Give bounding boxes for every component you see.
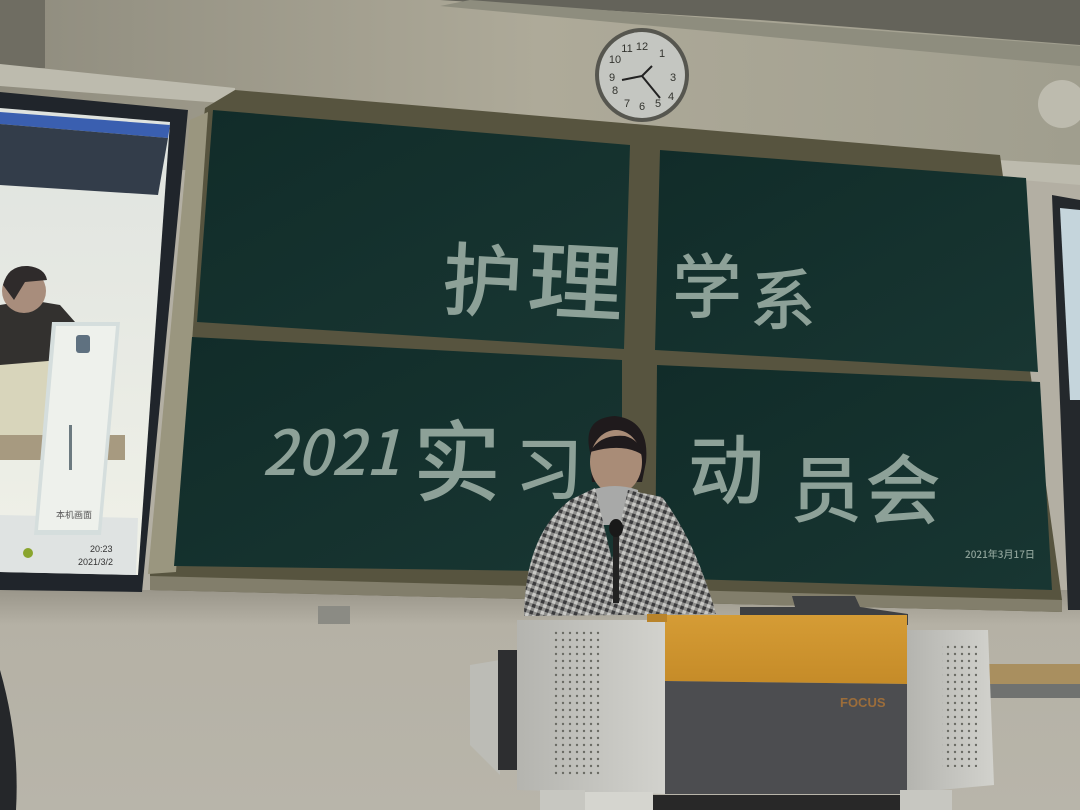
blackboard frame (150, 90, 1062, 612)
chalk title: nursing department: 护 (440, 216, 526, 336)
wall clock: 9 (609, 72, 615, 84)
wall clock: 10 (609, 54, 621, 66)
wall clock: 4 (668, 91, 674, 103)
presenter on screen (0, 266, 75, 365)
right screen edge (1052, 195, 1080, 610)
wall clock: 7 (624, 98, 630, 110)
chalk title: 2021 internship mobilization meeting: 2021年3月17日 (965, 546, 1035, 561)
chalk title: nursing department (440, 214, 816, 344)
wall clock: 8 (612, 85, 618, 97)
wall clock: 11 (621, 43, 633, 55)
projection screen left (0, 92, 188, 592)
lectern: FOCUS (840, 695, 886, 710)
chalk title: 2021 internship mobilization meeting: 习 (515, 415, 583, 514)
chalk title: 2021 internship mobilization meeting: 实 (413, 393, 501, 520)
chalk title: 2021 internship mobilization meeting: 动 (688, 410, 764, 520)
chalk title: 2021 internship mobilization meeting (262, 393, 1035, 561)
wall clock: 12 (636, 41, 648, 53)
chalk tray (150, 576, 1062, 612)
light strip beside board (148, 112, 208, 574)
chalk title: nursing department: 系 (750, 248, 816, 344)
wall clock: 1 (659, 48, 665, 60)
wall clock: 5 (655, 98, 661, 110)
taskbar (23, 544, 113, 567)
taskbar: 20:23 (90, 544, 113, 554)
chalk title: 2021 internship mobilization meeting: 员 (790, 432, 862, 537)
wall clock (595, 28, 689, 122)
phone overlay on screen: 本机画面 (56, 509, 92, 520)
phone overlay on screen (34, 322, 120, 535)
chalk title: 2021 internship mobilization meeting: 2021 (262, 403, 400, 493)
chalk title: 2021 internship mobilization meeting: 会 (865, 430, 941, 540)
wall clock: 3 (670, 72, 676, 84)
chalk title: nursing department: 理 (525, 214, 627, 340)
lectern (470, 614, 994, 810)
taskbar: 2021/3/2 (78, 557, 113, 567)
wall clock: 6 (639, 101, 645, 113)
blackboard panels (174, 110, 1052, 590)
eraser and wall items (0, 596, 1080, 810)
chalk title: nursing department: 学 (672, 232, 742, 333)
speaker (524, 416, 716, 616)
